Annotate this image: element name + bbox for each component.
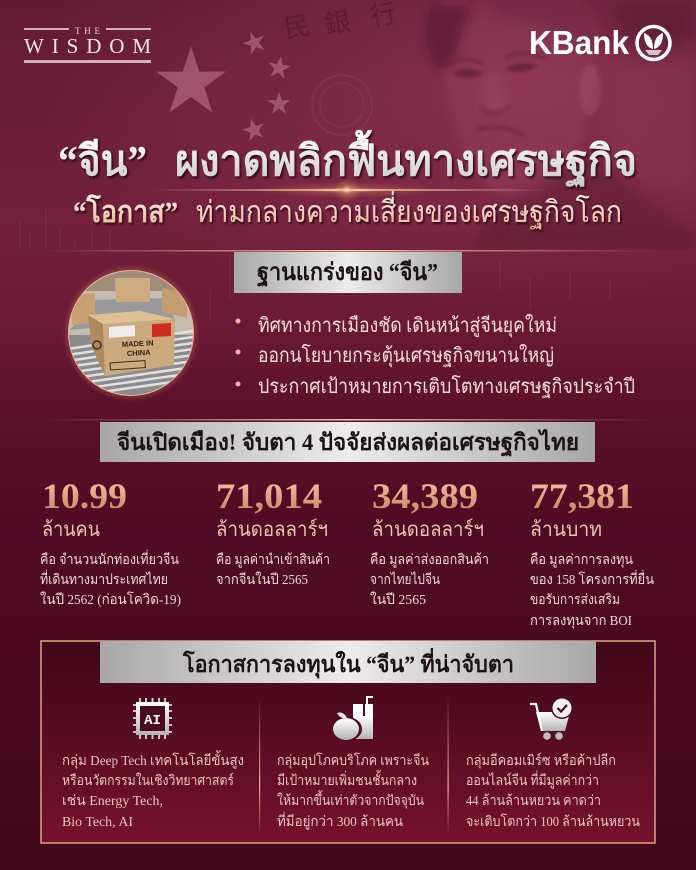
stat: exports (370, 476, 489, 608)
stat: imports: คือ มูลค่านำเข้าสินค้า (216, 552, 330, 568)
heading banner: strengths: ฐานแกร่งของ “จีน” (257, 259, 438, 288)
logo: The Wisdom: WISDOM (24, 34, 151, 58)
title flare (150, 178, 550, 202)
icon: AI chip (133, 698, 172, 739)
heading banner: four factors: จีนเปิดเมือง! จับตา 4 ปัจจัยส่งผลต่อเศรษฐกิจไทย (116, 428, 579, 457)
subtitle: “โอกาส” (73, 193, 178, 229)
text: consumer goods: ให้มากขึ้นเท่าตัวจากปัจจุบัน (277, 790, 424, 809)
stat: imports: ล้านดอลลาร์ฯ (216, 518, 328, 541)
text: e-commerce: กลุ่มอีคอมเมิร์ซ หรือค้าปลีก (466, 752, 616, 769)
stat: tourists: 10.99 (42, 476, 127, 516)
bullet list: ทิศทางการเมืองชัด เดินหน้าสู่จีนยุคใหม่ (258, 314, 557, 338)
stat: exports: จากไทยไปจีน (370, 571, 440, 588)
logo: The Wisdom (24, 26, 151, 63)
stat: imports: 71,014 (216, 476, 322, 516)
text: consumer goods: ที่มีอยู่กว่า 300 ล้านคน (277, 812, 403, 830)
stat: tourists: ที่เดินทางมาประเทศไทย (40, 570, 168, 588)
stat: investment: ขอรับการส่งเสริม (530, 593, 620, 608)
subtitle (73, 191, 622, 230)
stat: investment: คือ มูลค่าการลงทุน (530, 552, 633, 568)
text: deep tech: หรือนวัตกรรมในเชิงวิทยาศาสตร์ (62, 772, 234, 789)
text: e-commerce: จะเติบโตกว่า 100 ล้านล้านหยวน (466, 813, 640, 830)
stat: exports: 34,389 (372, 476, 478, 516)
stat: exports: ล้านดอลลาร์ฯ (372, 518, 484, 541)
bullet list (236, 314, 635, 398)
text: consumer goods: มีเป้าหมายเพิ่มชนชั้นกลาง (277, 770, 417, 789)
heading banner: opportunities: โอกาสการลงทุนใน “จีน” ที่น่าจับตา (182, 647, 514, 679)
logo: The Wisdom: THE (75, 26, 100, 36)
heading banner: opportunities (100, 641, 596, 683)
stat: imports: จากจีนในปี 2565 (216, 571, 308, 588)
stat: investment (530, 476, 654, 629)
stat: exports: ในปี 2565 (370, 591, 426, 608)
bullet list: ประกาศเป้าหมายการเติบโตทางเศรษฐกิจประจำปี (258, 375, 635, 398)
subtitle: ท่ามกลางความเสี่ยงของเศรษฐกิจโลก (196, 191, 622, 230)
stat: investment: ของ 158 โครงการที่ยื่น (530, 570, 654, 588)
stat: tourists: คือ จำนวนนักท่องเที่ยวจีน (40, 550, 179, 568)
background: faint banknote characters: 銀 (322, 7, 353, 40)
divider middle (40, 419, 656, 420)
photo: made in china box (64, 266, 198, 400)
stat: exports: คือ มูลค่าส่งออกสินค้า (370, 552, 489, 568)
stat: investment: การลงทุนจาก BOI (530, 614, 632, 629)
stat: tourists (40, 476, 181, 608)
heading banner: four factors (100, 422, 595, 462)
bullet list: ออกนโยบายกระตุ้นเศรษฐกิจขนานใหญ่ (258, 344, 554, 368)
photo: made in china box: CHINA (127, 348, 151, 358)
panel: investment opportunities (41, 641, 655, 843)
text: e-commerce: ออนไลน์จีน ที่มีมูลค่ากว่า (466, 771, 599, 789)
text: deep tech: Bio Tech, AI (62, 815, 133, 830)
stat: tourists: ล้านคน (42, 519, 100, 541)
title (58, 129, 637, 188)
stat: investment: ล้านบาท (530, 519, 602, 541)
stat: imports (216, 476, 330, 588)
icon: apple and drink (332, 697, 373, 741)
title: ผงาดพลิกฟื้นทางเศรษฐกิจ (175, 129, 637, 188)
text: deep tech: กลุ่ม Deep Tech เทคโนโลยีขั้นสูง (62, 750, 244, 769)
text: consumer goods (277, 752, 429, 830)
divider top (40, 250, 656, 252)
text: deep tech: เช่น Energy Tech, (62, 794, 163, 809)
text: deep tech (62, 750, 244, 830)
text: e-commerce: 44 ล้านล้านหยวน คาดว่า (466, 793, 601, 809)
icon: shopping cart with check (530, 697, 573, 740)
icon: AI chip: AI (144, 713, 161, 729)
text: e-commerce (466, 752, 640, 830)
logo: KBank: KBank (529, 24, 630, 61)
stat: investment: 77,381 (530, 476, 634, 516)
text: consumer goods: กลุ่มอุปโภคบริโภค เพราะจีน (277, 752, 429, 769)
background: banknote portrait (312, 0, 696, 250)
heading banner: strengths (234, 252, 462, 293)
title: “จีน” (58, 138, 147, 185)
photo: made in china box: MADE IN (122, 338, 154, 349)
stat: tourists: ในปี 2562 (ก่อนโควิด-19) (40, 591, 181, 608)
flag stars (156, 28, 292, 142)
background: faint banknote characters: 民 (282, 11, 313, 44)
background: faint banknote characters (282, 0, 399, 44)
